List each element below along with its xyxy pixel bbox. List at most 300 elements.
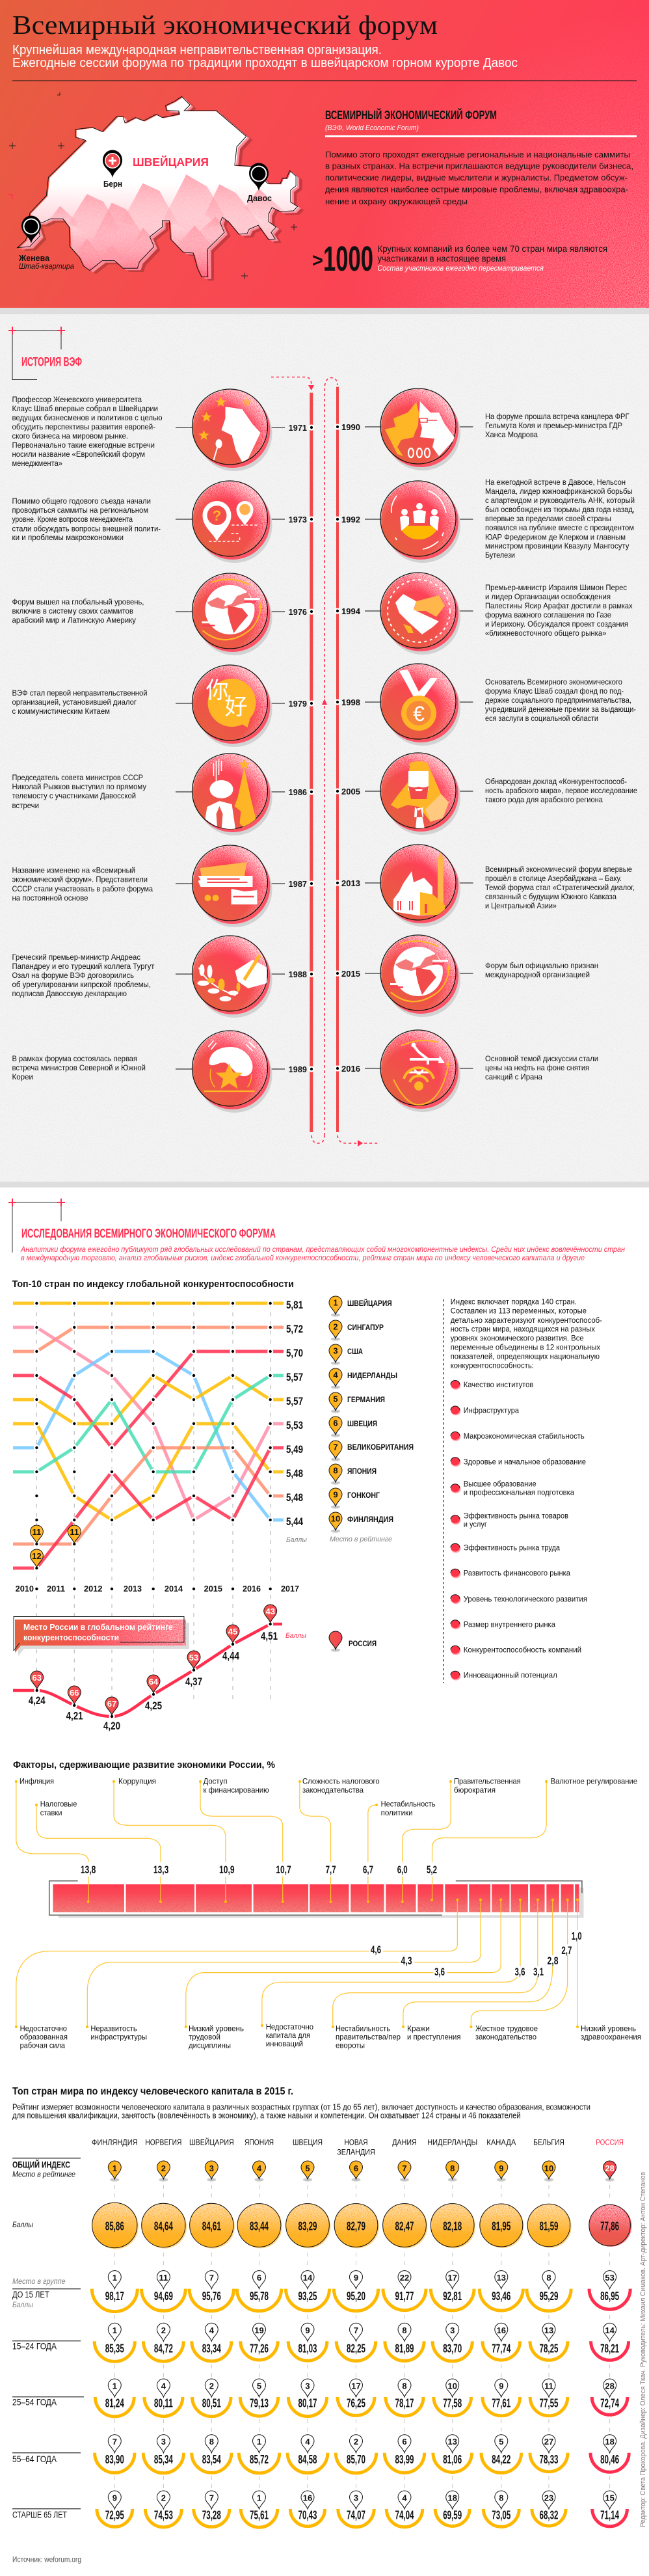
heading: WEF block: [325, 108, 637, 137]
legend: countries: 9: [333, 1490, 338, 1499]
row: overall rank pins: Место в рейтинге: [12, 2171, 75, 2179]
row: 15-24: 77,74: [492, 2342, 510, 2355]
heading: WEF block: ВСЕМИРНЫЙ ЭКОНОМИЧЕСКИЙ ФОРУМ: [325, 108, 497, 122]
factor values: bottom: 1,0: [572, 1930, 582, 1942]
row: over 65: 71,14: [600, 2509, 619, 2522]
row: 55-64: 4: [305, 2437, 310, 2447]
dots on leader lines: [15, 1780, 579, 2028]
column heads: countries: НОРВЕГИЯ: [145, 2139, 181, 2147]
timeline row 1987: на постоянной основе: [12, 893, 88, 902]
row: 25-54: 81,24: [105, 2397, 124, 2410]
row: overall rank pins: 28: [605, 2163, 615, 2173]
heading: research: [8, 1199, 625, 1262]
factor values: bottom: [371, 1930, 582, 1978]
factor labels: bottom: инфраструктуры: [90, 2032, 147, 2041]
timeline row 1976: Форум вышел на глобальный уровень,: [12, 597, 144, 606]
bar: factors strip: [49, 1881, 583, 1918]
heading: research: в международную торговлю, анализ глобальных рисков, индекс глобальной конкурентоспособности, рейтинг стран мира по индексу человеческого капитала и другие: [21, 1253, 585, 1262]
timeline row 1986: [12, 753, 315, 835]
factor labels: bottom: правительства/пер: [336, 2032, 401, 2041]
row: overall rank pins: ОБЩИЙ ИНДЕКС: [12, 2159, 70, 2170]
row: overall score circles: 82,47: [395, 2220, 414, 2233]
row: under 15: 9: [354, 2273, 358, 2283]
timeline row 2013: [334, 845, 635, 927]
timeline row 1992: 1992: [341, 515, 360, 524]
row: 15-24: 2: [161, 2325, 166, 2335]
text block: index description: переменные объединены в 12 контрольных: [451, 1344, 600, 1351]
timeline row 1998: учредивший денежные премии за выдающи-: [485, 705, 636, 714]
timeline row 1992: впервые за пределами своей страны: [485, 514, 611, 523]
line chart: Russia rank: 43: [265, 1607, 275, 1616]
legend: countries: ШВЕЦИЯ: [347, 1420, 377, 1428]
icon: Arab man in headdress: [391, 761, 449, 829]
axis: years: 2014: [165, 1584, 183, 1593]
row: under 15: 86,95: [600, 2290, 619, 2303]
timeline row 1979: ВЭФ стал первой неправительственной: [12, 688, 147, 698]
row: over 65: 9: [113, 2493, 117, 2502]
subtitle: Крупнейшая международная неправительственная организация.: [12, 43, 382, 57]
icon: Chinese greeting bubble: 好: [225, 688, 248, 722]
row: 25-54: 9: [499, 2381, 503, 2391]
timeline row 1987: экономический форум». Представители: [12, 874, 148, 884]
row: 15-24: 78,21: [600, 2342, 619, 2355]
row: over 65: 70,43: [298, 2509, 317, 2522]
row: 55-64: 78,33: [540, 2453, 558, 2466]
legend: countries: ФИНЛЯНДИЯ: [347, 1516, 393, 1524]
factor labels: top: Нестабильность: [381, 1800, 436, 1809]
line chart: Russia rank: 67: [107, 1699, 116, 1709]
timeline row 2015: Форум был официально признан: [485, 961, 598, 970]
row: under 15: 91,77: [395, 2290, 414, 2303]
chart pins: ranks 11 and 12: [30, 1525, 81, 1567]
row: 55-64: 7: [113, 2437, 117, 2447]
row: 15-24: 13: [544, 2325, 553, 2335]
factor labels: bottom: Недостаточно: [266, 2022, 313, 2031]
row: overall rank pins: 7: [402, 2163, 407, 2173]
legend: countries: Место в рейтинге: [330, 1536, 392, 1543]
timeline row 1971: [12, 389, 315, 471]
timeline row 1994: [334, 573, 633, 655]
timeline row 1988: Папандреу и его турецкий коллега Тургут: [12, 962, 155, 971]
row: 55-64: 83,99: [395, 2453, 414, 2466]
row: 55-64: 84,58: [298, 2453, 317, 2466]
timeline row 1989: Кореи: [12, 1072, 33, 1081]
row: 55-64: 2: [354, 2437, 358, 2447]
row: 25-54: 80,11: [154, 2397, 173, 2410]
row: overall score circles: 77,86: [600, 2220, 619, 2233]
timeline row 1973: 1973: [289, 515, 307, 524]
row: under 15: 94,69: [154, 2290, 173, 2303]
legend: countries: США: [347, 1348, 363, 1356]
row: under 15: 95,76: [202, 2290, 221, 2303]
chart end values: Баллы: [286, 1536, 307, 1544]
axis: years: 2015: [204, 1584, 222, 1593]
list: 12 pillars: Макроэкономическая стабильность: [464, 1433, 585, 1441]
row: over 65: [12, 2491, 627, 2527]
row: over 65: 73,05: [492, 2509, 510, 2522]
factor labels: top: ставки: [40, 1808, 62, 1817]
legend: countries: 3: [333, 1346, 338, 1356]
map label: Geneva: [18, 254, 74, 271]
row: 55-64: 85,70: [347, 2453, 365, 2466]
timeline row 1987: 1987: [289, 880, 307, 889]
text block: WEF description: дения являются наиболее острые мировые проблемы, включая здравоохра-: [325, 185, 628, 194]
chart end values: 5,53: [286, 1419, 303, 1431]
line chart: Russia rank: 4,37: [185, 1675, 202, 1688]
row: 15-24: 7: [354, 2325, 358, 2335]
line chart: Russia rank: [13, 1605, 306, 1732]
row: under 15: 14: [303, 2273, 313, 2283]
line chart: Russia rank: 63: [32, 1673, 42, 1683]
legend: countries: ГОНКОНГ: [347, 1492, 380, 1500]
timeline row 1986: Председатель совета министров СССР: [12, 773, 143, 782]
factor labels: top: Сложность налогового: [302, 1777, 380, 1786]
row: overall score circles: 83,44: [250, 2220, 269, 2233]
row: 25-54: 79,13: [250, 2397, 269, 2410]
timeline row 1976: включив в систему своих саммитов: [12, 606, 133, 616]
chart end values: 5,57: [286, 1395, 303, 1407]
timeline row 1979: организацией, установившей диалог: [12, 698, 137, 707]
timeline row 1990: 1990: [341, 423, 360, 432]
timeline row 1971: Профессор Женевского университета: [12, 395, 142, 404]
factor labels: bottom: Низкий уровень: [189, 2024, 244, 2033]
row: under 15: 22: [400, 2273, 409, 2283]
axis: years: 2010: [16, 1584, 34, 1593]
factor labels: bottom: Нестабильность: [336, 2024, 390, 2033]
timeline row 2016: Основной темой дискуссии стали: [485, 1054, 598, 1063]
icon: Baku mosque: [393, 852, 445, 915]
timeline row 1988: об урегулировании кипрской проблемы,: [12, 980, 151, 989]
map label: Davos: Давос: [247, 194, 272, 203]
row: 25-54: 25–54 ГОДА: [12, 2397, 57, 2407]
row: over 65: 68,32: [540, 2509, 558, 2522]
row: over 65: 74,04: [395, 2509, 414, 2522]
row: overall rank pins: 10: [544, 2163, 553, 2173]
timeline row 1994: Премьер-министр Израиля Шимон Перес: [485, 583, 627, 592]
row: 55-64: 6: [402, 2437, 407, 2447]
timeline row 1990: На форуме прошла встреча канцлера ФРГ: [485, 412, 629, 421]
icon: handshake: [388, 580, 450, 642]
column heads: countries: ЯПОНИЯ: [245, 2139, 274, 2147]
row: 55-64: 85,34: [154, 2453, 173, 2466]
row: 25-54: 80,51: [202, 2397, 221, 2410]
legend: countries: 4: [333, 1370, 338, 1379]
column heads: countries: ШВЕЙЦАРИЯ: [189, 2139, 234, 2147]
row: over 65: 75,61: [250, 2509, 269, 2522]
factor values: bottom: 3,6: [515, 1966, 525, 1978]
row: under 15: 95,20: [347, 2290, 365, 2303]
factor labels: bottom: Низкий уровень: [581, 2024, 636, 2033]
text block: WEF description: в разных странах. На встречи приглашаются ведущие руководители бизнеса,: [325, 161, 633, 170]
legend: countries: 2: [333, 1322, 338, 1331]
chart pins: ranks 11 and 12: 11: [33, 1527, 41, 1537]
timeline row 1992: [334, 478, 635, 563]
chart end values: 5,57: [286, 1371, 303, 1383]
timeline row 1988: Озал на форуме ВЭФ договорились: [12, 971, 134, 980]
row: 15-24: 78,25: [540, 2342, 558, 2355]
timeline row 1986: встречи: [12, 801, 39, 810]
timeline row 1994: и лидер Организации освобождения: [485, 592, 611, 601]
legend: countries: ГЕРМАНИЯ: [347, 1396, 385, 1404]
chart end values: 5,48: [286, 1467, 303, 1480]
icon: Davos pin: [249, 163, 269, 191]
row: 55-64: 18: [605, 2437, 615, 2447]
timeline row 1994: Палестины Ясир Арафат достигли в рамках: [485, 601, 633, 610]
row: under 15: ДО 15 ЛЕТ: [12, 2289, 49, 2299]
row: over 65: 69,59: [443, 2509, 462, 2522]
row: under 15: [12, 2271, 630, 2312]
timeline row 1994: 1994: [341, 607, 360, 616]
factor values: bottom: 4,3: [401, 1955, 412, 1967]
callout: Russia's place: конкурентоспособности: [23, 1633, 119, 1642]
row: over 65: 74,53: [154, 2509, 173, 2522]
timeline row 1986: телемосту с участниками Давосской: [12, 791, 136, 800]
axis: years: 2011: [47, 1584, 65, 1593]
timeline row 1971: ского бизнеса на мировом рынке.: [12, 431, 128, 441]
callout: more than 1000 companies: >: [312, 250, 323, 271]
row: 15-24: 83,70: [443, 2342, 462, 2355]
row: overall rank pins: [12, 2158, 616, 2182]
row: 15-24: 14: [605, 2325, 615, 2335]
row: overall rank pins: 1: [113, 2163, 117, 2173]
heading: factors: Факторы, сдерживающие развитие экономики России, %: [13, 1759, 275, 1770]
line chart: Russia rank: 4,20: [103, 1720, 120, 1732]
factor values: top: 7,7: [326, 1864, 336, 1876]
timeline row 2015: международной организацией: [485, 970, 590, 979]
column heads: countries: ДАНИЯ: [392, 2139, 417, 2147]
timeline row 1990: [334, 388, 629, 470]
line chart: Russia rank: 4,25: [145, 1700, 162, 1712]
timeline row 1971: Клаус Шваб впервые собрал в Швейцарии: [12, 404, 158, 413]
row: 55-64: 80,46: [600, 2453, 619, 2466]
list: 12 pillars: Инновационный потенциал: [464, 1672, 557, 1680]
list: 12 pillars: [451, 1381, 587, 1680]
factor values: bottom: 2,7: [561, 1944, 572, 1957]
row: 15-24: 84,72: [154, 2342, 173, 2355]
row: under 15: 93,25: [298, 2290, 317, 2303]
row: 15-24: 83,34: [202, 2342, 221, 2355]
heading: human capital: Топ стран мира по индексу человеческого капитала в 2015 г.: [12, 2086, 293, 2097]
text block: index description: [451, 1299, 602, 1370]
list: 12 pillars: и услуг: [464, 1521, 487, 1529]
factor labels: top: Валютное регулирование: [551, 1777, 637, 1786]
timeline row 2016: санкций с Ирана: [485, 1072, 542, 1081]
chart end values: [286, 1299, 307, 1544]
row: overall rank pins: 4: [257, 2163, 262, 2173]
column heads: countries: ШВЕЦИЯ: [293, 2139, 323, 2147]
row: 55-64: 85,72: [250, 2453, 269, 2466]
timeline row 2005: Обнародован доклад «Конкурентоспособ-: [485, 777, 627, 786]
dashed connectors between rows: [114, 2185, 610, 2493]
chart end values: 5,70: [286, 1347, 303, 1359]
timeline row 2016: 2016: [341, 1064, 360, 1074]
timeline row 1998: Основатель Всемирного экономического: [485, 677, 622, 686]
text block: index description: показателей, определяющих национальную: [451, 1353, 600, 1361]
legend: countries: ШВЕЙЦАРИЯ: [347, 1299, 392, 1308]
list: 12 pillars: Уровень технологического развития: [464, 1595, 587, 1603]
timeline row 1992: Мандела, лидер южноафриканской борьбы: [485, 487, 633, 496]
text block: WEF description: политические лидеры, видные мыслители и журналисты. Предметом обсуж-: [325, 173, 628, 182]
timeline row 1990: Ханса Модрова: [485, 430, 538, 439]
factor labels: top: Налоговые: [40, 1800, 77, 1809]
timeline row 2015: 2015: [341, 969, 360, 979]
row: 55-64: 13: [447, 2437, 457, 2447]
factor labels: top: Коррупция: [118, 1777, 156, 1786]
column heads: countries: НИДЕРЛАНДЫ: [427, 2139, 477, 2147]
legend: countries: 7: [333, 1442, 338, 1452]
icon: Chinese greeting bubble: [206, 679, 256, 727]
timeline row 1976: 1976: [289, 608, 307, 617]
icon: two faces: [385, 401, 455, 457]
icon: Chinese greeting bubble: 你: [205, 672, 229, 705]
timeline row 1998: 1998: [341, 698, 360, 707]
factor labels: bottom: Недостаточно: [20, 2024, 67, 2033]
row: 15-24: 85,35: [105, 2342, 124, 2355]
factor values: top: [81, 1864, 437, 1876]
factor values: top: 10,9: [219, 1864, 235, 1876]
timeline row 1979: [12, 665, 315, 747]
row: 25-54: 5: [257, 2381, 261, 2391]
column heads: countries: НОВАЯ: [345, 2139, 368, 2147]
legend: countries: СИНГАПУР: [347, 1324, 384, 1332]
map of Switzerland: [8, 92, 306, 280]
credits: Редактор: Света Прохорова. Дизайнер: Олеся Ткач. Руководитель: Михаил Симаков. Арт-директор: Антон Степанов: [639, 2172, 647, 2527]
timeline row 1988: [12, 936, 315, 1018]
row: overall rank pins: 8: [450, 2163, 455, 2173]
map label: Geneva: Штаб-квартира: [19, 263, 74, 271]
column heads: countries: ЗЕЛАНДИЯ: [337, 2149, 375, 2157]
chart end values: 5,44: [286, 1515, 303, 1528]
timeline row 1998: [334, 664, 636, 746]
timeline axis with arrows: [271, 377, 379, 1146]
text block: WEF description: Помимо этого проходят ежегодные региональные и национальные саммиты: [325, 150, 630, 159]
row: overall score circles: [12, 2203, 631, 2249]
timeline row 1979: 1979: [289, 699, 307, 709]
row: under 15: 13: [497, 2273, 506, 2283]
callout: more than 1000 companies: [312, 239, 607, 278]
timeline row 1973: уровне. Кроме вопросов менеджмента: [12, 515, 133, 524]
column heads: countries: ФИНЛЯНДИЯ: [92, 2139, 138, 2147]
timeline row 1994: «ближневосточного общего рынка»: [485, 629, 607, 638]
icon: globe: [202, 579, 263, 640]
row: 25-54: [12, 2379, 628, 2417]
map label: Switzerland: ШВЕЙЦАРИЯ: [133, 155, 209, 169]
row: 55-64: 3: [161, 2437, 166, 2447]
icon: summit map pins: ?: [213, 508, 221, 524]
line chart: Russia rank: 4,44: [222, 1650, 239, 1662]
row: 25-54: 8: [402, 2381, 407, 2391]
legend: countries: 6: [333, 1418, 338, 1428]
chart end values: 5,48: [286, 1491, 303, 1504]
factor values: top: 6,0: [397, 1864, 408, 1876]
row: under 15: 95,78: [250, 2290, 269, 2303]
text block: human capital description: [12, 2102, 590, 2121]
row: 55-64: 5: [499, 2437, 503, 2447]
factor labels: top: законодательства: [302, 1785, 364, 1795]
row: under 15: 17: [447, 2273, 457, 2283]
factor labels: bottom: и преступления: [407, 2032, 460, 2041]
timeline row 1988: 1988: [289, 970, 307, 979]
list: 12 pillars: Размер внутреннего рынка: [464, 1621, 556, 1629]
timeline row 2013: связанный с будущим Южного Кавказа: [485, 892, 616, 901]
row: 25-54: 2: [209, 2381, 214, 2391]
row: 15-24: 3: [450, 2325, 455, 2335]
row: over 65: 16: [303, 2493, 312, 2502]
timeline row 1989: В рамках форума состоялась первая: [12, 1054, 137, 1063]
row: 25-54: 77,61: [492, 2397, 510, 2410]
timeline row 2013: Темой форума стал «Стратегический диалог,: [485, 883, 635, 892]
icon: medal with euro: €: [413, 702, 425, 725]
row: overall score circles: 84,61: [202, 2220, 221, 2233]
row: overall score circles: 85,86: [105, 2220, 124, 2233]
column heads: countries: РОССИЯ: [596, 2139, 624, 2147]
row: under 15: Место в группе: [12, 2278, 66, 2286]
chart pins: ranks 11 and 12: 11: [70, 1527, 79, 1537]
row: over 65: 18: [447, 2493, 457, 2502]
timeline row 1992: На ежегодной встрече в Давосе, Нельсон: [485, 478, 626, 487]
legend: countries: 1: [333, 1297, 338, 1308]
row: 25-54: 10: [447, 2381, 457, 2391]
text block: human capital description: для повышения квалификации, занятость (вовлечённость в экономику), а также навыки и компетенции. Он охватывает 124 страны и 46 показателей: [12, 2111, 521, 2121]
heading: research: ИССЛЕДОВАНИЯ ВСЕМИРНОГО ЭКОНОМИЧЕСКОГО ФОРУМА: [21, 1227, 276, 1241]
line chart: Russia rank: Баллы: [285, 1632, 306, 1640]
row: under 15: 93,46: [492, 2290, 510, 2303]
row: 15-24: 16: [497, 2325, 506, 2335]
row: 15-24: 81,03: [298, 2342, 317, 2355]
timeline row 1973: проводиться саммиты на региональном: [12, 506, 148, 515]
row: 55-64: 84,22: [492, 2453, 510, 2466]
legend: countries: НИДЕРЛАНДЫ: [347, 1372, 397, 1380]
row: overall rank pins: 3: [209, 2163, 214, 2173]
callout: Russia's place: [14, 1616, 189, 1656]
factor labels: top: Доступ: [203, 1777, 228, 1786]
list: 12 pillars: Качество институтов: [464, 1381, 533, 1389]
factor labels: bottom: трудовой: [189, 2032, 220, 2041]
row: 25-54: 77,55: [540, 2397, 558, 2410]
column heads: countries: БЕЛЬГИЯ: [533, 2139, 564, 2147]
row: over 65: 7: [209, 2493, 214, 2502]
row: 55-64: 1: [257, 2437, 261, 2447]
timeline row 2005: ность арабского мира», первое исследование: [485, 786, 637, 795]
row: 55-64: 55–64 ГОДА: [12, 2454, 57, 2464]
factor values: bottom: 2,8: [548, 1955, 558, 1967]
timeline row 1994: форума важного соглашения по Газе: [485, 610, 611, 619]
row: over 65: 15: [605, 2493, 615, 2502]
timeline row 1987: Название изменено на «Всемирный: [12, 866, 135, 875]
row: 55-64: 27: [544, 2437, 553, 2447]
timeline row 1989: [12, 1031, 315, 1113]
timeline row 1994: и Иерихону. Обсуждался проект создания: [485, 619, 628, 629]
row: 25-54: 4: [161, 2381, 166, 2391]
line chart: Russia rank: 64: [149, 1677, 159, 1687]
row: overall rank pins: 2: [161, 2163, 166, 2173]
row: overall score circles: 83,29: [298, 2220, 317, 2233]
factor labels: bottom: законодательство: [475, 2032, 536, 2041]
timeline row 1988: подписав Давосскую декларацию: [12, 989, 127, 998]
row: under 15: Баллы: [12, 2301, 33, 2309]
factor values: bottom: 3,6: [434, 1966, 445, 1978]
row: 15-24: 19: [254, 2325, 264, 2335]
icon: Schwab with microphone: [199, 397, 260, 462]
axis: years: [16, 1584, 299, 1593]
row: under 15: 53: [605, 2273, 615, 2283]
row: 25-54: 11: [544, 2381, 553, 2391]
timeline row 1973: ки и проблемы макроэкономики: [12, 533, 124, 542]
row: 15-24: 82,25: [347, 2342, 365, 2355]
timeline row 1992: с апартеидом и руководитель АНК, который: [485, 496, 635, 505]
text block: WEF description: нение и охрану окружающей среды: [325, 197, 468, 206]
row: 55-64: [12, 2435, 629, 2473]
